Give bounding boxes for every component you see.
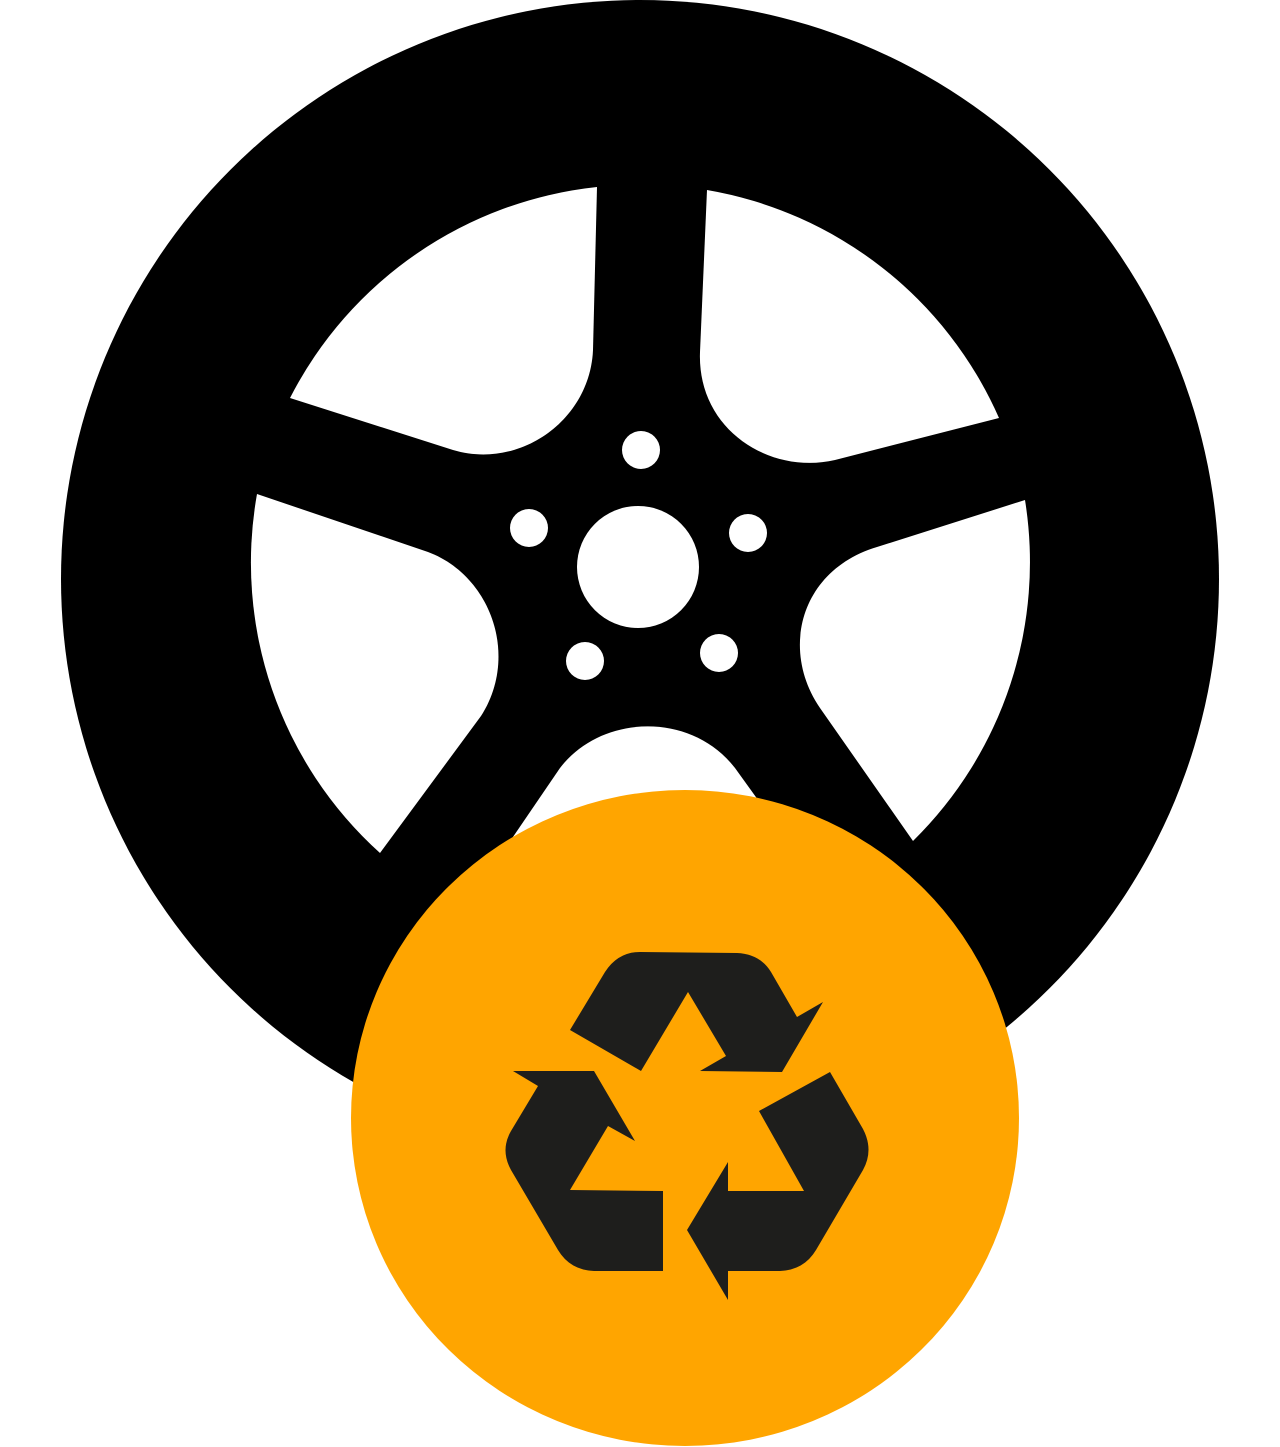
icon: tire — [61, 0, 1219, 1158]
badge: orange circle — [351, 790, 1019, 1446]
icon: recycle symbol — [506, 952, 868, 1300]
